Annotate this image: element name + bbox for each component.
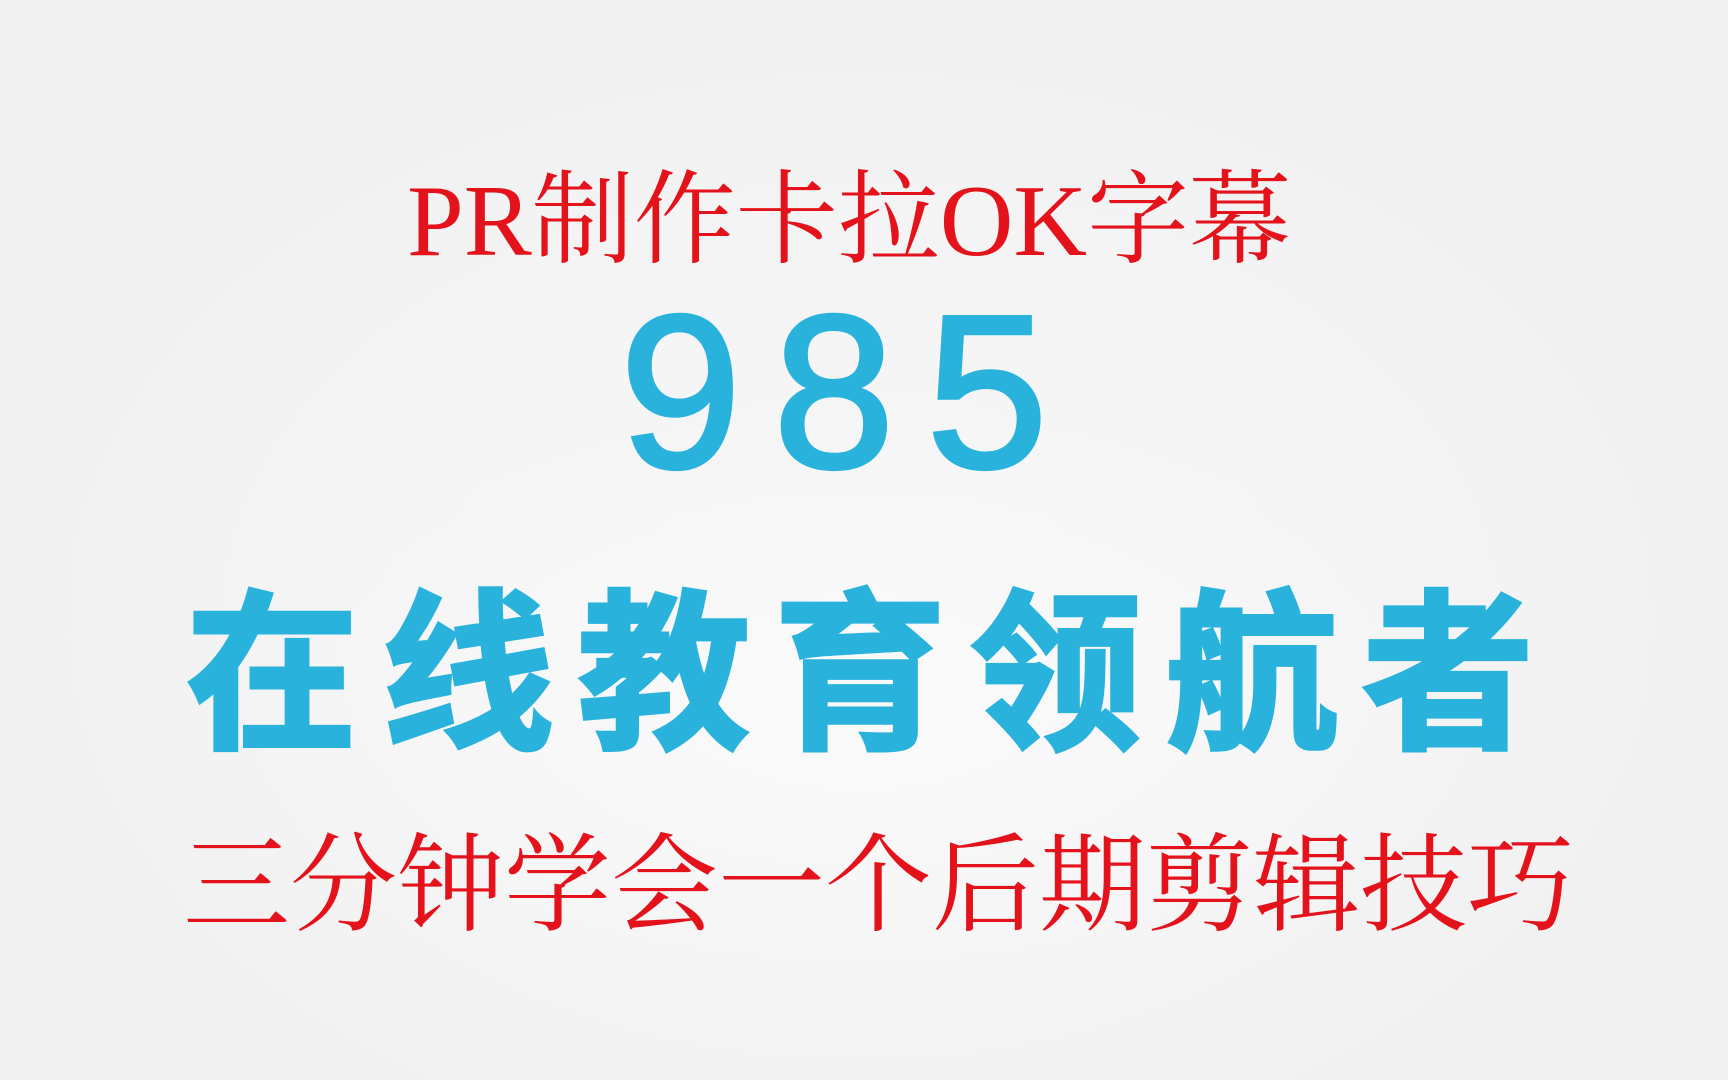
title: PR制作卡拉OK字幕 xyxy=(407,165,1291,278)
number 985: 985 xyxy=(620,271,1080,514)
brand heading: 在线教育领航者 xyxy=(186,580,1558,772)
subtitle: 三分钟学会一个后期剪辑技巧 xyxy=(183,828,1574,946)
